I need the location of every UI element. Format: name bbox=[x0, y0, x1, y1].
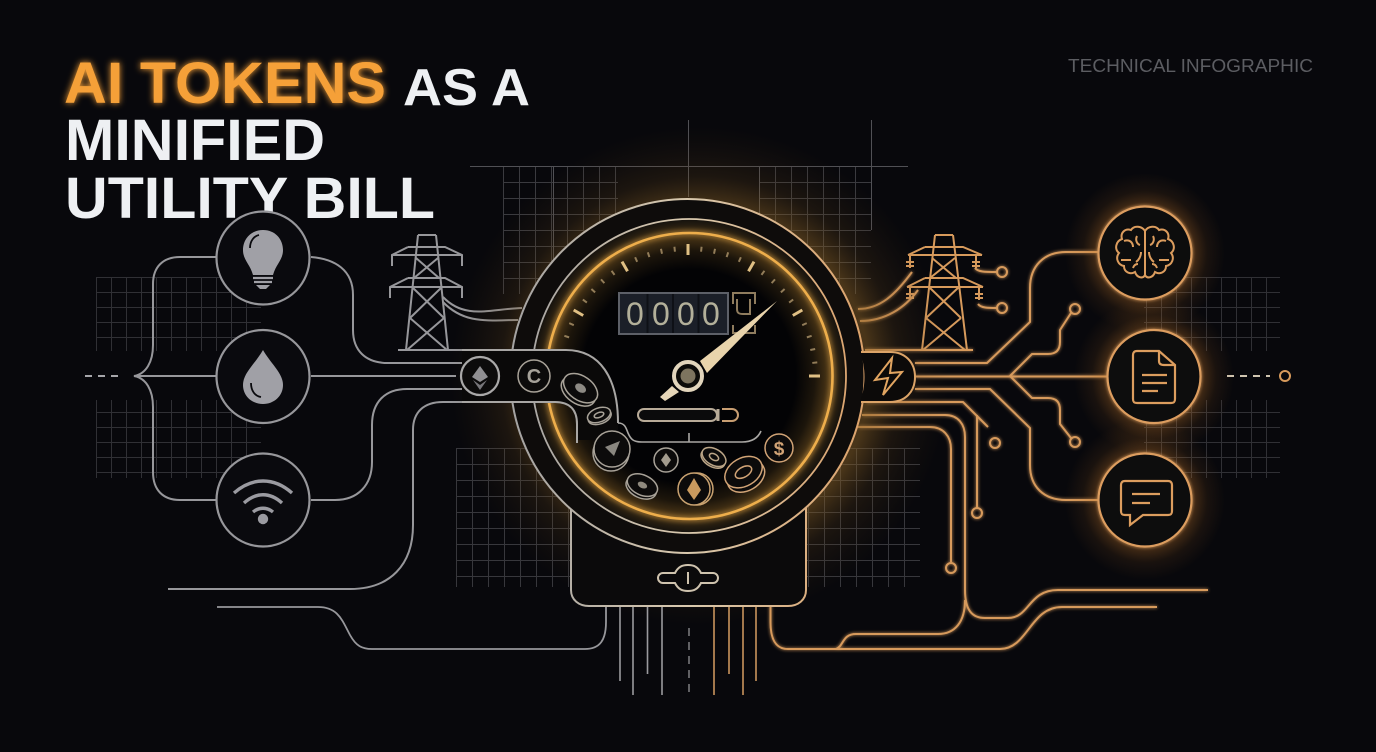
glowing gold ring bbox=[546, 233, 832, 519]
icon: brain bbox=[1098, 206, 1192, 300]
tag line: technical infographic: TECHNICAL INFOGRAPHIC bbox=[1068, 55, 1313, 76]
coin: large ethereum bbox=[593, 431, 630, 471]
right transmission tower bbox=[906, 235, 983, 350]
left utility circuit lines bbox=[85, 257, 606, 649]
meter housing base bbox=[571, 500, 806, 606]
digital readout bbox=[619, 293, 755, 334]
outer casing ring bbox=[510, 199, 864, 553]
title: MINIFIED bbox=[65, 108, 325, 173]
icon: chat bubble bbox=[1098, 454, 1192, 546]
title: AI TOKENS bbox=[64, 51, 386, 116]
panel: AI outputs bbox=[1065, 173, 1234, 580]
gauge tick marks bbox=[564, 244, 820, 376]
glow: output circles bbox=[1065, 173, 1234, 580]
meter base latch bbox=[658, 565, 718, 591]
coin: ethereum in pipe bbox=[461, 357, 499, 395]
left transmission tower bbox=[390, 235, 462, 350]
digital readout: 0000 bbox=[626, 296, 720, 332]
right power circuit lines bbox=[770, 252, 1208, 649]
meter glow bbox=[450, 126, 950, 626]
far right dashed connector bbox=[1227, 371, 1290, 381]
token feed pipe bbox=[462, 350, 761, 443]
panel: utility inputs bbox=[216, 212, 310, 546]
needle bbox=[660, 301, 777, 401]
token coins bbox=[461, 357, 793, 505]
icon: document bbox=[1108, 330, 1200, 423]
coin: tilted lower left bbox=[622, 469, 661, 504]
power junction with lightning bolt bbox=[860, 352, 915, 402]
coin: cent in pipe bbox=[518, 360, 550, 392]
coin: ethereum gold bbox=[678, 473, 713, 505]
coin: dollar bbox=[765, 434, 793, 462]
icon: water drop bbox=[216, 330, 310, 423]
inner dial face bbox=[532, 219, 846, 533]
terminal pins bbox=[620, 607, 756, 695]
title: UTILITY BILL bbox=[65, 166, 435, 231]
coin: small round bbox=[654, 448, 678, 472]
coin: tilted in pipe bbox=[556, 367, 603, 412]
icon: light bulb bbox=[216, 212, 310, 304]
title: AS A bbox=[403, 59, 530, 117]
icon: wifi bbox=[216, 454, 310, 546]
coin: cent in pipe: C bbox=[527, 366, 541, 388]
fill level bar bbox=[638, 409, 738, 421]
coin: large tilted right bbox=[719, 450, 770, 499]
utility meter dial bbox=[510, 199, 864, 553]
blueprint grids bbox=[96, 120, 1280, 587]
title bbox=[64, 51, 530, 231]
coin: dollar: $ bbox=[774, 439, 785, 460]
coin: small tilted bbox=[585, 404, 613, 428]
tray line bbox=[618, 423, 761, 442]
coin: tilted center right bbox=[698, 444, 729, 472]
